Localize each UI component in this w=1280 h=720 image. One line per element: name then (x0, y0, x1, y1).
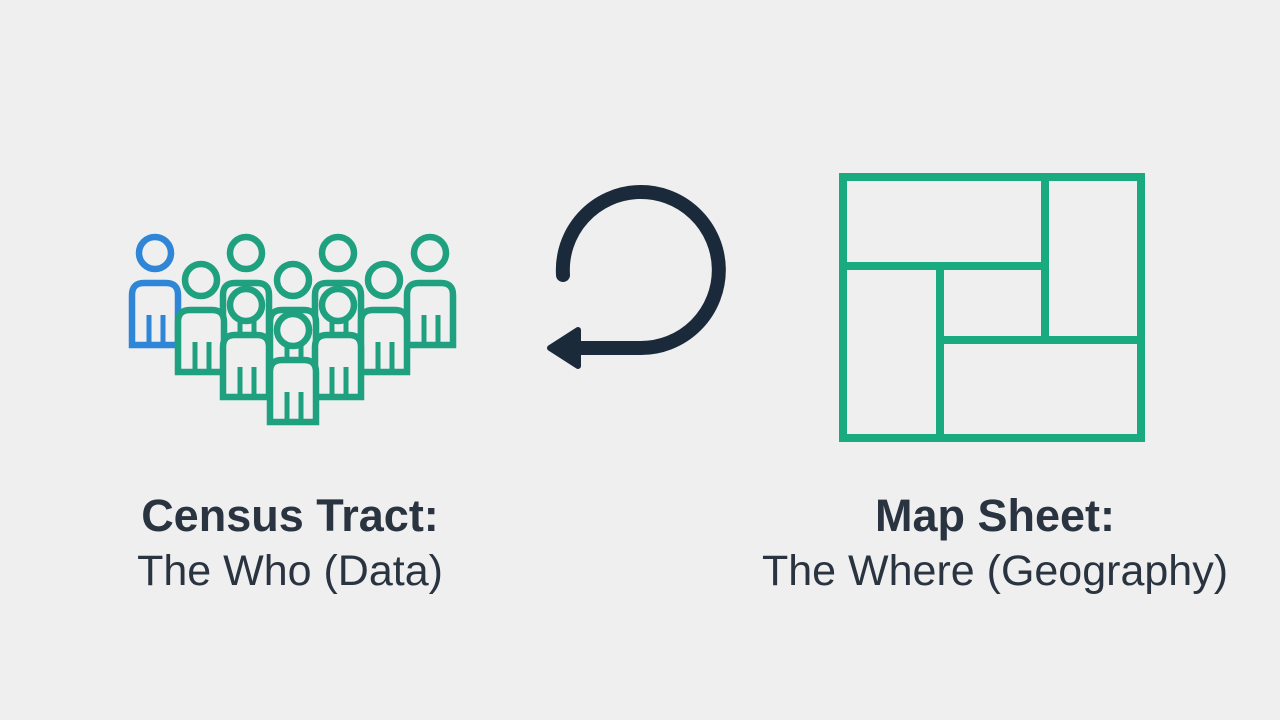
label: map sheet (762, 490, 1228, 595)
arrow: cycle (550, 192, 719, 366)
icon: map sheet (843, 177, 1141, 438)
icon: group of people (132, 237, 453, 422)
label: census tract: Census Tract: (141, 490, 439, 541)
label: census tract (137, 490, 443, 595)
label: map sheet: Map Sheet: (875, 490, 1115, 541)
label: map sheet: The Where (Geography) (762, 547, 1228, 595)
label: census tract: The Who (Data) (137, 547, 443, 595)
